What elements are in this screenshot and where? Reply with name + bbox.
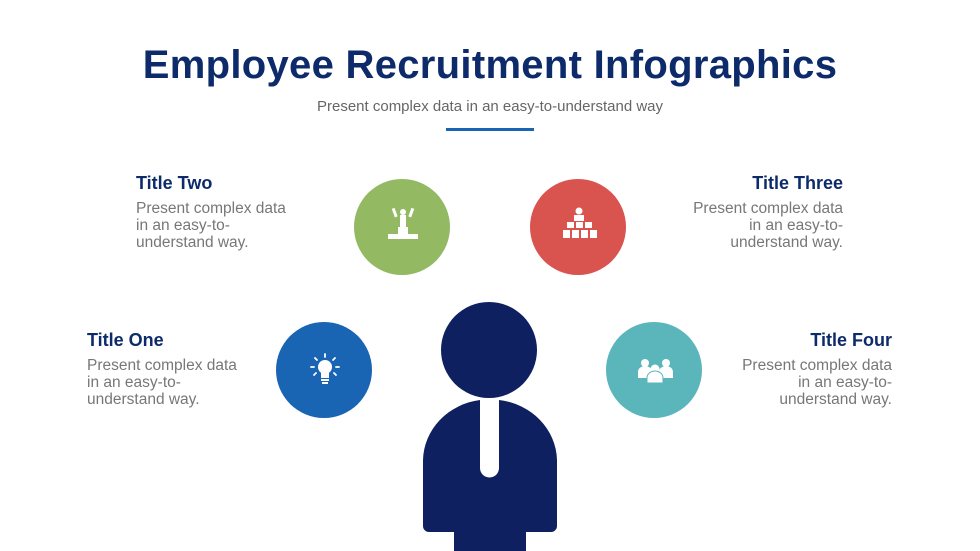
text: title three: Title Three bbox=[752, 173, 843, 193]
text: title two: in an easy-to- bbox=[136, 217, 230, 234]
text: title four: understand way. bbox=[779, 391, 892, 408]
text: title three bbox=[693, 173, 843, 251]
person figure bbox=[423, 302, 557, 551]
icon circle: teal team bbox=[606, 322, 702, 418]
text: title two: Title Two bbox=[136, 173, 212, 193]
text: title three: in an easy-to- bbox=[749, 217, 843, 234]
text: title three: Present complex data bbox=[693, 200, 843, 217]
icon circle: red hierarchy bbox=[530, 179, 626, 275]
text: title four: in an easy-to- bbox=[798, 374, 892, 391]
divider accent bbox=[446, 128, 534, 131]
icon circle: green podium bbox=[354, 179, 450, 275]
text: title four: Title Four bbox=[810, 330, 892, 350]
text: title one: in an easy-to- bbox=[87, 374, 181, 391]
text: title two bbox=[136, 173, 286, 251]
subtitle: Present complex data in an easy-to-understand way bbox=[317, 98, 663, 115]
text: title four bbox=[742, 330, 892, 408]
text: title one: Present complex data bbox=[87, 357, 237, 374]
text: title two: understand way. bbox=[136, 234, 249, 251]
icon circle: blue lightbulb bbox=[276, 322, 372, 418]
text: title three: understand way. bbox=[730, 234, 843, 251]
text: title one: Title One bbox=[87, 330, 164, 350]
text: title one: understand way. bbox=[87, 391, 200, 408]
text: title one bbox=[87, 330, 237, 408]
text: title two: Present complex data bbox=[136, 200, 286, 217]
title: Employee Recruitment Infographics bbox=[143, 43, 837, 87]
text: title four: Present complex data bbox=[742, 357, 892, 374]
